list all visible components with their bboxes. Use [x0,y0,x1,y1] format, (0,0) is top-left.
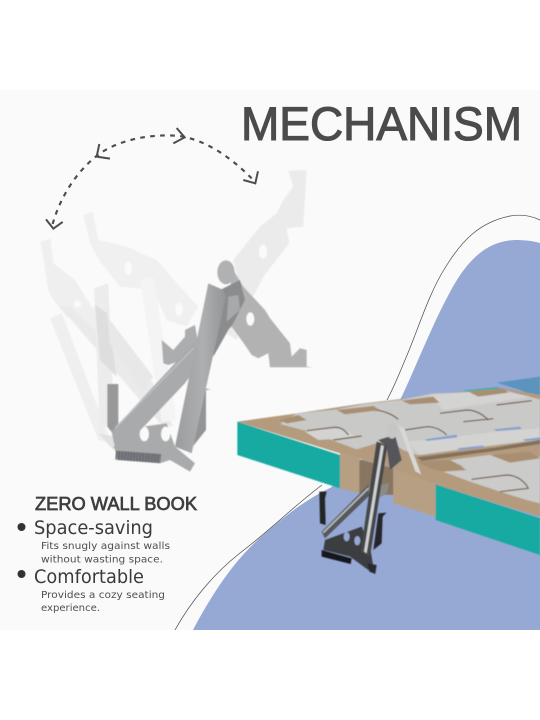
description: space-saving: Fits snugly against walls [41,541,170,552]
feature: comfortable: Comfortable [34,566,144,588]
top link [378,435,402,470]
infographic canvas [18,106,540,630]
teal foam right [436,484,540,555]
slat shadow lines [307,401,532,492]
teal foam left [237,422,340,488]
long vertical arm [175,283,226,453]
description: comfortable: Provides a cozy seating [41,590,165,601]
bed frame cut-away [237,377,540,574]
bullet 2 [18,570,26,578]
ghost position, far left [41,239,173,450]
dark wood stripe [417,440,540,461]
dark mechanism in frame [319,423,421,574]
base plate [113,423,195,472]
ghost position, middle [83,212,198,433]
title: MECHANISM [241,97,522,150]
thin outline curve [175,215,540,630]
wood block right [393,468,436,517]
vertical rail [361,442,387,557]
frame interior recess [359,459,393,495]
bracket back legs [107,384,118,433]
main mechanism [107,260,313,472]
background panel [0,90,540,630]
blue background blob [193,240,540,630]
wood block left [340,453,359,493]
woven slats [280,390,540,455]
blue end cushion [497,377,540,398]
back legs [319,492,327,525]
motion arrows [46,128,258,229]
feature: space-saving: Space-saving [34,517,153,539]
wood patches [280,388,540,472]
diagonal rail [322,485,372,538]
lighter slats [305,390,540,455]
upper bright blade [398,425,421,475]
spring [116,451,161,463]
description: space-saving: without wasting space. [41,554,163,566]
left bracket plate [162,325,200,365]
mechanism illustration [41,128,313,472]
wood top frame [237,388,540,517]
ghost position, upper right [227,170,307,340]
foot block [322,550,352,564]
pivot linkage [213,280,245,357]
pivot pin [217,260,235,284]
bullet 1 [18,523,26,531]
heading: zero wall book: ZERO WALL BOOK [35,494,197,514]
base plate [323,527,373,570]
arm plate [220,270,313,367]
blue slat gaps [425,427,540,450]
diagonal arm [112,343,202,448]
description: comfortable: experience. [41,603,100,614]
